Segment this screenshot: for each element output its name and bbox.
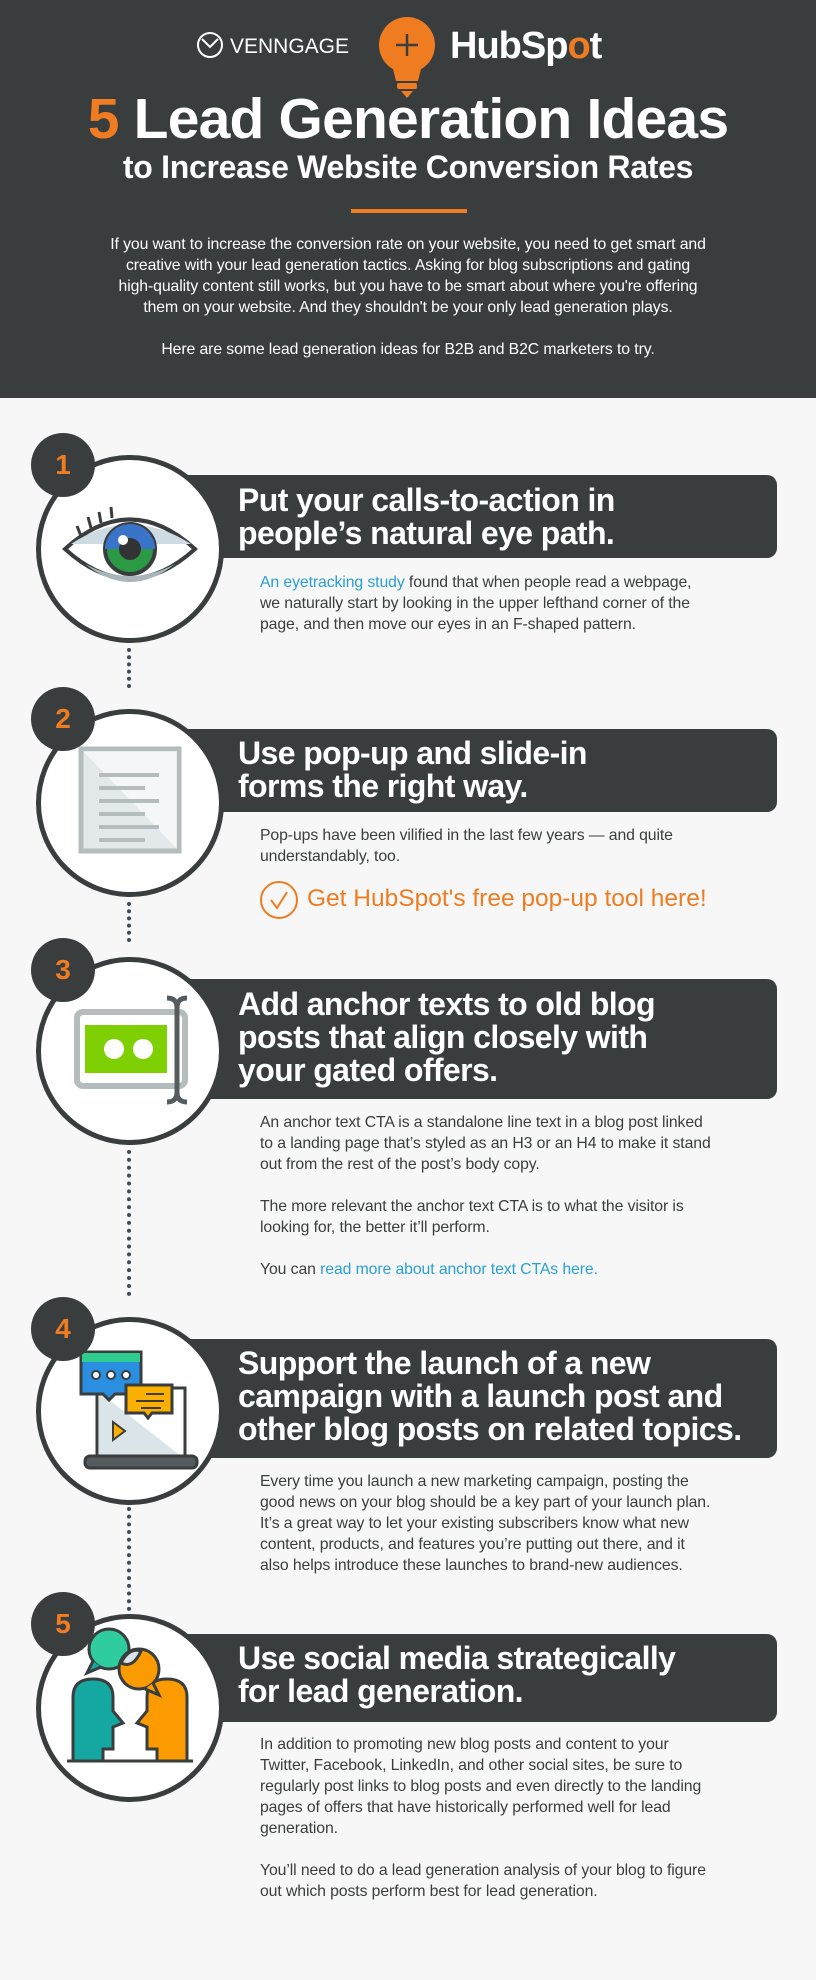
heading 2: [238, 735, 587, 804]
cta: hubspot popup tool: [260, 881, 707, 919]
section 3: [31, 938, 777, 1278]
icon: laptop with chat bubbles: [36, 1317, 224, 1505]
body 4: Every time you launch a new marketing campaign, posting the: [260, 1473, 689, 1490]
body 4: also helps introduce these launches to brand-new audiences.: [260, 1557, 683, 1574]
icon: form document: [36, 709, 224, 897]
header panel: [0, 0, 816, 398]
body 3: looking for, the better it’ll perform.: [260, 1219, 490, 1236]
body 1: [260, 574, 691, 633]
logo: venngage: VENNGAGE: [230, 35, 349, 58]
intro paragraph: If you want to increase the conversion rate on your website, you need to get smart and: [110, 236, 706, 253]
intro paragraph: Here are some lead generation ideas for B2B and B2C marketers to try.: [161, 341, 655, 358]
title: 5 Lead Generation Ideas: [88, 87, 728, 151]
heading 4: campaign with a launch post and: [238, 1378, 723, 1414]
number badge 5: [31, 1592, 95, 1656]
heading bar 4: [150, 1339, 777, 1458]
connector dots: [127, 902, 132, 942]
heading 2: Use pop-up and slide-in: [238, 735, 587, 771]
body 4: It’s a great way to let your existing subscribers know what new: [260, 1515, 689, 1532]
body 3: out from the rest of the post’s body copy.: [260, 1156, 540, 1173]
body 4: good news on your blog should be a key part of your launch plan.: [260, 1494, 710, 1511]
number badge 3: [31, 938, 95, 1002]
heading 3: [238, 986, 655, 1088]
section 2: [31, 687, 777, 919]
number badge 1: [31, 433, 95, 497]
heading 3: posts that align closely with: [238, 1019, 647, 1055]
number badge 2: 2: [55, 703, 71, 734]
intro paragraph: them on your website. And they shouldn't be your only lead generation plays.: [143, 299, 673, 316]
heading bar 1: [150, 475, 777, 558]
body 3: An anchor text CTA is a standalone line text in a blog post linked: [260, 1114, 703, 1131]
orange divider: [351, 209, 467, 213]
heading 3: Add anchor texts to old blog: [238, 986, 655, 1022]
number badge 5: 5: [55, 1608, 71, 1639]
heading bar 2: [150, 729, 777, 812]
icon: eye: [36, 455, 224, 643]
heading 2: forms the right way.: [238, 768, 528, 804]
heading 4: Support the launch of a new: [238, 1345, 650, 1381]
heading 5: [238, 1640, 676, 1709]
connector dots: [127, 1150, 132, 1296]
body 5: [260, 1736, 706, 1900]
heading 1: Put your calls-to-action in: [238, 482, 615, 518]
body 2: understandably, too.: [260, 848, 400, 865]
number badge 2: [31, 687, 95, 751]
intro paragraph: [110, 236, 706, 358]
body 2: Pop-ups have been vilified in the last few years — and quite: [260, 827, 673, 844]
icon: orange bulb with plus: [379, 17, 435, 98]
body 1: An eyetracking study found that when people read a webpage,: [260, 574, 691, 591]
body 5: You’ll need to do a lead generation analysis of your blog to figure: [260, 1862, 706, 1879]
number badge 3: 3: [55, 954, 71, 985]
body 5: In addition to promoting new blog posts and content to your: [260, 1736, 669, 1753]
heading 4: [238, 1345, 742, 1447]
logo: venngage: [197, 32, 349, 58]
body 3: [260, 1114, 711, 1278]
intro paragraph: creative with your lead generation tactics. Asking for blog subscriptions and gating: [126, 257, 690, 274]
body 3: to a landing page that’s styled as an H3 or an H4 to make it stand: [260, 1135, 711, 1152]
heading 4: other blog posts on related topics.: [238, 1411, 742, 1447]
body 4: content, products, and features you’re putting out there, and it: [260, 1536, 685, 1553]
connector dots: [127, 648, 132, 688]
body 1: page, and then move our eyes in an F-shaped pattern.: [260, 616, 636, 633]
connector dots: [127, 1507, 132, 1611]
cta: hubspot popup tool: Get HubSpot's free pop-up tool here!: [307, 885, 707, 912]
heading 1: people’s natural eye path.: [238, 515, 614, 551]
intro paragraph: high-quality content still works, but you have to be smart about where you're offering: [119, 278, 697, 295]
body 2: [260, 827, 673, 865]
heading 1: [238, 482, 615, 551]
body 3: The more relevant the anchor text CTA is to what the visitor is: [260, 1198, 684, 1215]
number badge 4: [31, 1297, 95, 1361]
body 5: pages of offers that have historically performed well for lead: [260, 1799, 671, 1816]
subtitle: to Increase Website Conversion Rates: [123, 149, 693, 185]
heading 3: your gated offers.: [238, 1052, 497, 1088]
heading 5: for lead generation.: [238, 1673, 523, 1709]
number badge 1: 1: [55, 449, 71, 480]
icon: two people talking: [36, 1614, 224, 1802]
icon: anchor text button: [36, 957, 224, 1145]
body 4: [260, 1473, 710, 1574]
body 3: You can read more about anchor text CTAs here.: [260, 1261, 598, 1278]
heading bar 5: [150, 1634, 777, 1722]
heading 5: Use social media strategically: [238, 1640, 675, 1676]
body 5: Twitter, Facebook, LinkedIn, and other social sites, be sure to: [260, 1757, 682, 1774]
logo: hubspot: HubSpot: [450, 25, 601, 67]
body 5: out which posts perform best for lead generation.: [260, 1883, 598, 1900]
body 5: regularly post links to blog posts and even directly to the landing: [260, 1778, 701, 1795]
body 1: we naturally start by looking in the upper lefthand corner of the: [260, 595, 690, 612]
section 4: [31, 1297, 777, 1574]
heading bar 3: [150, 979, 777, 1099]
number badge 4: 4: [55, 1313, 71, 1344]
section 1: [31, 433, 777, 643]
body 5: generation.: [260, 1820, 338, 1837]
section 5: [31, 1592, 777, 1900]
